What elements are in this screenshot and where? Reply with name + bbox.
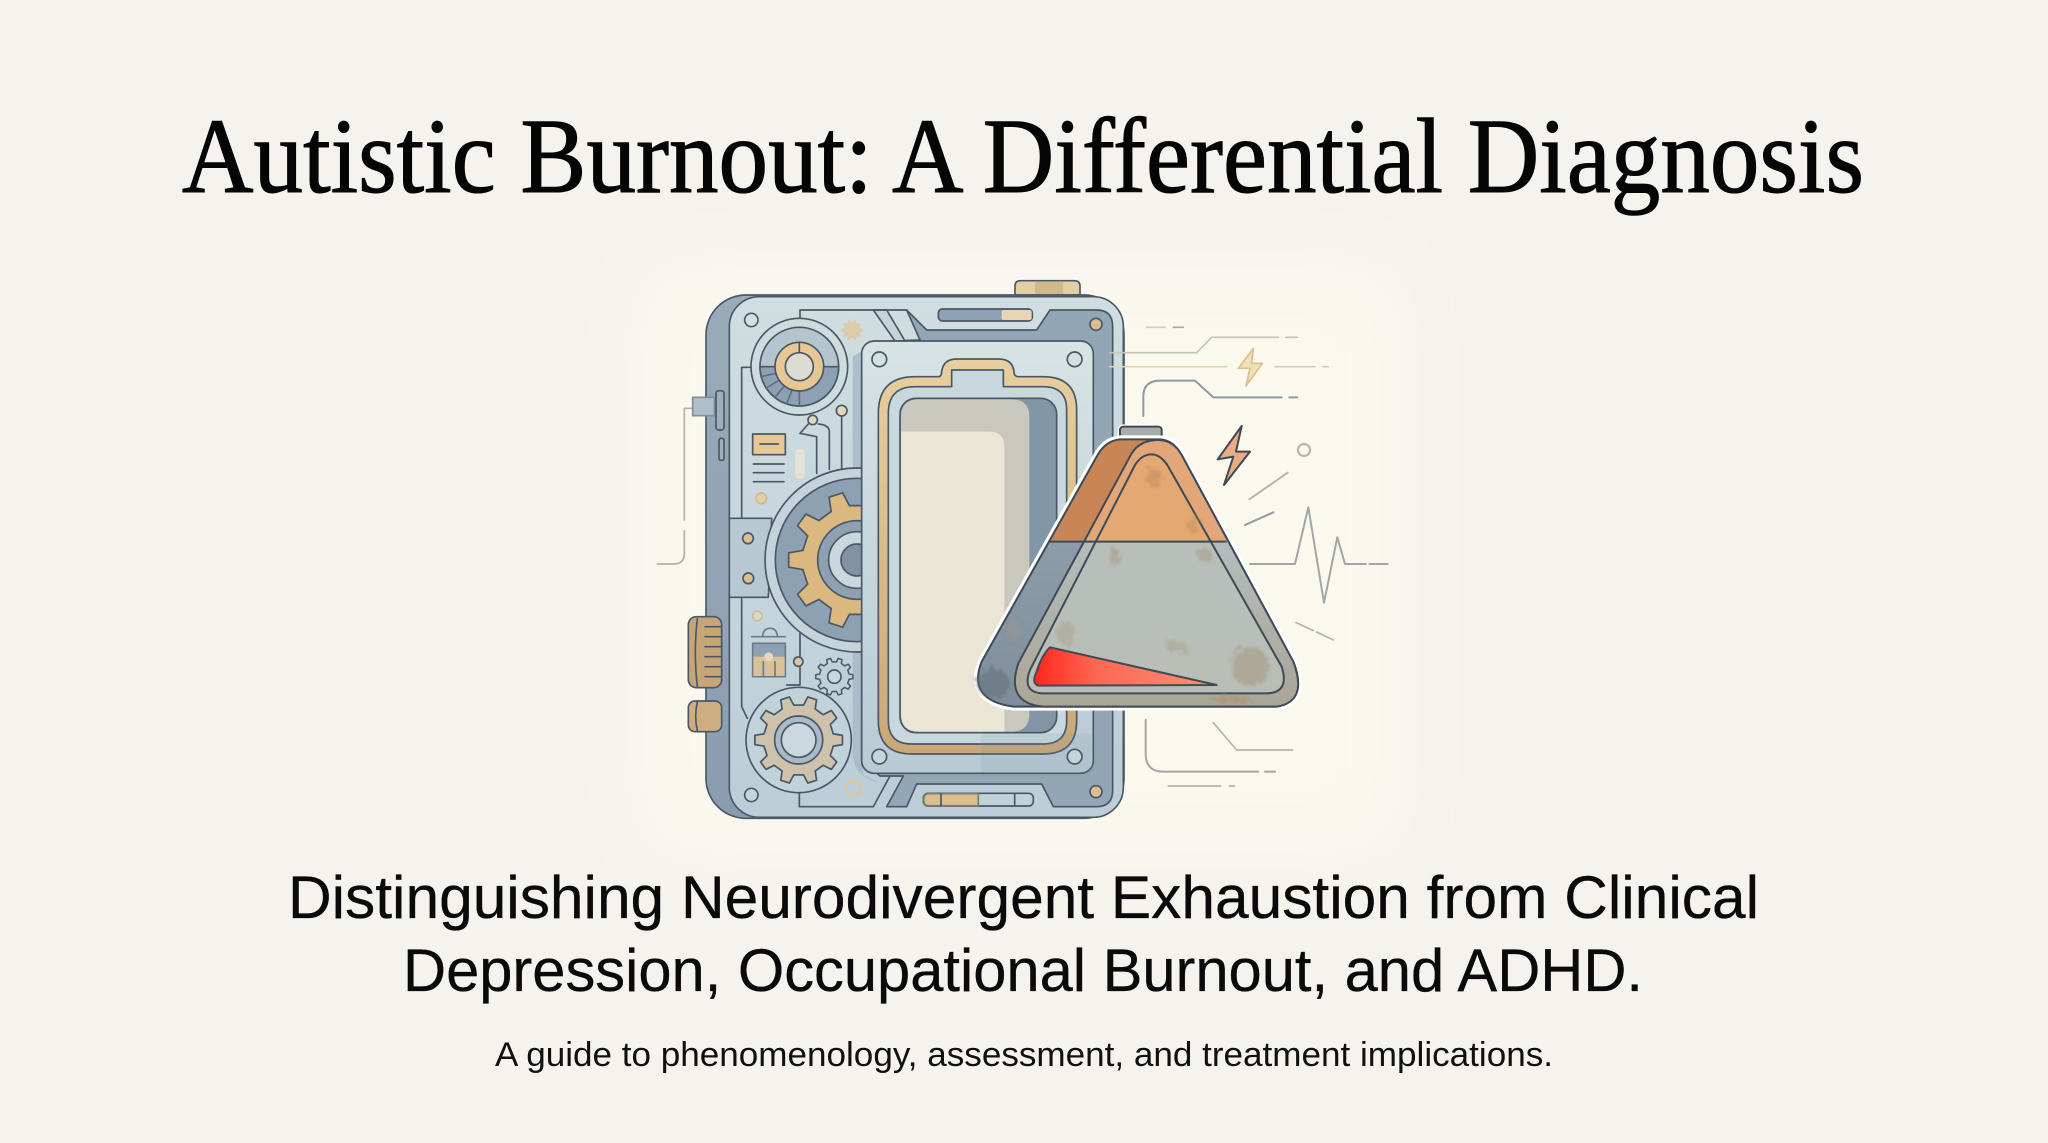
- tagline: A guide to phenomenology, assessment, and treatment implications.: [495, 1036, 1553, 1074]
- battery well: [900, 398, 1057, 733]
- small accent screws: [743, 493, 861, 796]
- circuit lines: [742, 367, 842, 718]
- critical charge level: [1034, 647, 1217, 686]
- subtitle: Distinguishing Neurodivergent Exhaustion from Clinical: [288, 864, 1759, 931]
- tan gear accent: [841, 320, 863, 340]
- diagonal stripes: [873, 310, 905, 341]
- lightning bolt: [1218, 426, 1250, 485]
- top slot: [938, 309, 1032, 321]
- fill level line: [1048, 539, 1227, 545]
- lock icon: [752, 628, 785, 677]
- battery gold frame: [878, 359, 1077, 754]
- small knob: [688, 701, 722, 732]
- triangular battery: [977, 426, 1298, 707]
- illustration: battery device with depleted triangular cell: [657, 281, 1388, 818]
- panel cast shadow: [853, 350, 880, 783]
- knurled knob: [688, 617, 722, 688]
- bottom slot: [923, 793, 1033, 806]
- screen panel: [862, 341, 1093, 773]
- screws: [745, 313, 1102, 802]
- lower gear: [746, 687, 851, 793]
- front shell: [1015, 440, 1298, 707]
- recessed area: [862, 310, 1113, 807]
- device chassis: [657, 281, 1124, 818]
- white halo: [978, 439, 1298, 707]
- top cap: [1015, 281, 1080, 295]
- trace nodes: [808, 405, 847, 425]
- main plate: [729, 297, 1123, 817]
- outer body: [706, 295, 1124, 818]
- panel bottom shade: [981, 733, 1093, 773]
- subtitle: [288, 864, 1759, 1004]
- left wire: [657, 408, 693, 564]
- rust stains: [977, 468, 1268, 703]
- label chip and text lines: [753, 434, 805, 482]
- dial: [751, 318, 848, 415]
- left block: [729, 518, 772, 597]
- subtitle: Depression, Occupational Burnout, and ADHD.: [403, 937, 1643, 1004]
- battery cream fill: [901, 432, 1004, 732]
- heartbeat trace: [1250, 507, 1388, 603]
- energy lines and sparks: [1110, 327, 1388, 786]
- faint lightning bolt: [1238, 348, 1262, 386]
- battery frame inner: [888, 370, 1067, 744]
- small gear: [816, 658, 853, 695]
- side switch: [693, 391, 724, 460]
- inner window: [1028, 454, 1284, 693]
- large gear: [765, 468, 949, 652]
- outer shell: [978, 439, 1298, 707]
- title: Autistic Burnout: A Differential Diagnosis: [182, 98, 1864, 216]
- terminal cap: [1120, 427, 1162, 443]
- battery gray fill: [901, 399, 1029, 732]
